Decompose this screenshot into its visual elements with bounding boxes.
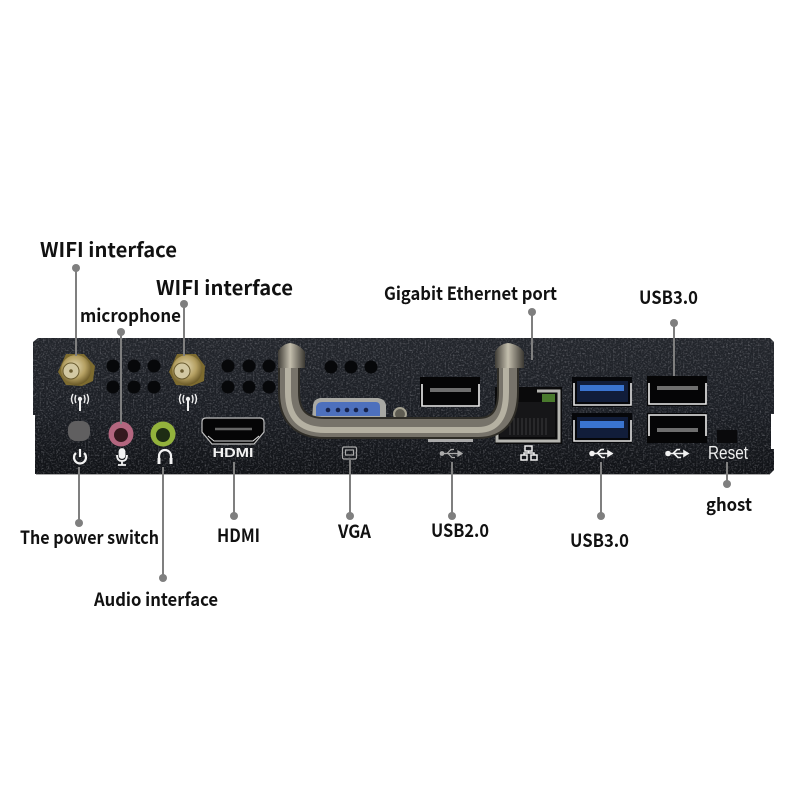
icon: wireless symbol left [72,394,88,411]
Reset label: Reset [708,443,748,463]
label: microphone: microphone [80,302,181,328]
leader: USB2.0 [448,462,456,520]
icon: USB symbol 1 [440,450,462,458]
label: USB3.0 bottom: USB3.0 [570,527,629,553]
label: The power switch: The power switch [20,524,159,550]
label: Audio interface: Audio interface [93,586,218,612]
HDMI logo: HDMI [212,446,254,460]
USB port right top [647,376,707,406]
USB2.0 lower edge [428,439,473,442]
icon: microphone symbol [117,449,127,465]
reset switch [717,430,737,443]
leader: VGA [346,460,354,520]
USB2.0 port [420,377,480,407]
leader: WIFI left [72,264,80,356]
microphone jack [108,422,134,446]
leader: microphone [117,328,125,424]
icon: network symbol [521,446,537,460]
label: USB2.0: USB2.0 [431,517,489,543]
USB3.0 port top [572,377,632,407]
RJ45 Ethernet port [495,387,562,444]
metal handle [278,343,524,430]
panel: device rear panel [33,338,774,474]
leader: Gigabit Ethernet [528,308,536,360]
icon: USB symbol 2 [590,450,612,458]
leader: audio [159,467,167,582]
leader: USB3.0 bottom [597,462,605,520]
power button [68,421,90,441]
leader: WIFI right [180,300,188,356]
leader: ghost [723,462,731,488]
label: Gigabit Ethernet port: Gigabit Ethernet port [384,280,557,306]
USB3.0 port bottom [572,413,632,443]
leader: HDMI [230,462,238,520]
audio jack [150,422,176,446]
leader: USB3.0 top [670,319,678,376]
icon: VGA symbol [342,447,356,459]
USB port right bottom [647,413,707,443]
icon: wireless symbol right [180,394,196,411]
label: HDMI: HDMI [217,522,260,548]
icon: power symbol [74,449,86,463]
VGA port [312,398,406,420]
icon: WIFI connector right [169,354,205,386]
label: VGA: VGA [337,518,371,544]
label: WIFI interface right: WIFI interface [156,272,293,301]
HDMI port [202,418,264,444]
leader: power switch [75,467,83,527]
icon: WIFI connector left [58,354,95,386]
icon: USB symbol 3 [666,450,688,458]
label: WIFI interface left: WIFI interface [40,234,177,263]
label: ghost: ghost [706,491,752,517]
icon: headphone symbol [159,450,171,464]
label: USB3.0 top: USB3.0 [639,284,698,310]
